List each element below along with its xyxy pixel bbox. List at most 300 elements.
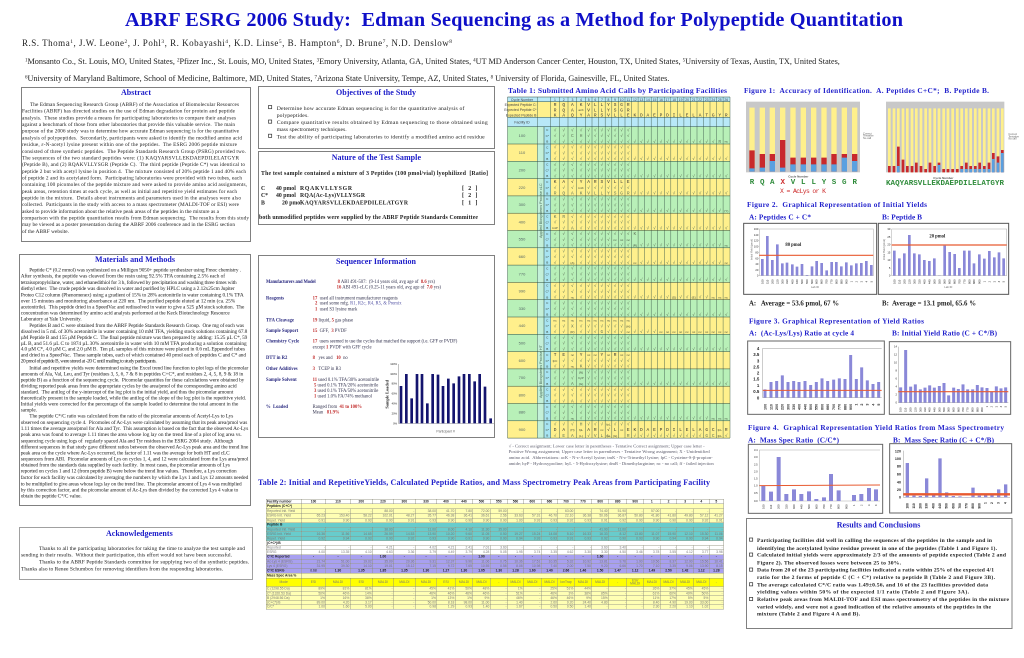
abstract text: (Peptide B), and (2) RQAKVLLYSGR (Peptide C). The third peptide (Peptide C*) was identical to — [22, 161, 245, 168]
figure 4 chart B: 440 — [938, 503, 942, 509]
materials text: to be multiplied to give areas whose logs lay on the trend line. The picomolar amount of Lys 4 was multiplied — [21, 480, 242, 487]
table 2: yields, ratios and mass spec peak areas: - — [348, 528, 349, 531]
sequencer details: 5 used 0.1% TFA/20% acetonitrile — [314, 383, 378, 388]
table 2: yields, ratios and mass spec peak areas: 15.30 — [700, 532, 708, 536]
figure 3 chart A: 4 — [871, 403, 875, 406]
figure 3 chart B: 110 — [904, 407, 908, 412]
table 1 header labels: 5 — [588, 98, 590, 102]
abstract text: comparison with the peptide quantitation results from Edman sequencing. The results from this study — [22, 215, 249, 222]
table 2: yields, ratios and mass spec peak areas: 0.92 — [408, 537, 414, 541]
table 2: yields, ratios and mass spec peak areas: 3% — [569, 592, 573, 595]
figure 4 chart A: 400 — [792, 504, 796, 509]
sequencer details: Sample Solvent — [266, 378, 297, 383]
table 2: yields, ratios and mass spec peak areas: - — [506, 587, 507, 591]
table 2: yields, ratios and mass spec peak areas: 0.94 — [702, 537, 708, 541]
row 800 — [519, 387, 634, 404]
table 2: yields, ratios and mass spec peak areas: 41.70 — [446, 509, 454, 513]
table 2: yields, ratios and mass spec peak areas: 7.15 — [430, 564, 436, 568]
figure 3 chart B: 2 — [896, 393, 898, 397]
figure 3 chart B: 550 — [942, 407, 946, 412]
row 900: 900 — [519, 427, 526, 432]
figure 1 peptide letters A: Q — [760, 179, 765, 187]
table 2: yields, ratios and mass spec peak areas: 0.58 — [500, 564, 507, 568]
figure 3 chart B — [889, 342, 1011, 414]
table 2: yields, ratios and mass spec peak areas: 9.31 — [430, 560, 436, 563]
table 2: yields, ratios and mass spec peak areas: C*/C Reported — [267, 555, 290, 559]
peptide column letters: C — [546, 370, 549, 374]
materials text: 4.0 µM C*, 4.0 µM C, and 2.0 µM B. Ten µL samples of this mixture were placed in 0.6 mL Eppendorf tubes — [21, 346, 245, 353]
table 2: yields, ratios and mass spec peak areas: 14.08 — [549, 532, 557, 536]
acknowledgements text: sending in their results. Without their participation, this effort would not have been successful. — [21, 552, 233, 559]
table 2: yields, ratios and mass spec peak areas: - — [716, 581, 717, 584]
table 2: yields, ratios and mass spec peak areas: 1.40 — [483, 605, 489, 609]
figure 2 chart A: 4 — [864, 280, 868, 282]
table 2: yields, ratios and mass spec peak areas: - — [565, 555, 567, 559]
table 2: yields, ratios and mass spec peak areas: 1% — [320, 596, 325, 600]
bar chart: sample loaded: 80% — [392, 382, 398, 386]
peptide column letters: C — [546, 197, 549, 201]
materials text: 1.11 times the average area/pmol for Ala and Tyr. This assumption is based on the fact that the observed Ac-Lys — [21, 425, 248, 432]
row 900: √√√H — [554, 421, 588, 427]
table 2: yields, ratios and mass spec peak areas: 21.74 — [317, 560, 325, 563]
table 2: yields, ratios and mass spec peak areas: - — [658, 528, 659, 531]
table 2: yields, ratios and mass spec peak areas: MALDI — [544, 581, 555, 584]
table 2: yields, ratios and mass spec peak areas: - — [668, 555, 669, 559]
peptide column letters: C* — [546, 186, 550, 190]
row 200: √√√√√√√ — [587, 173, 634, 179]
figure 3 chart B: 500 — [937, 407, 941, 412]
figure 4 chart A — [748, 444, 883, 513]
figure 1 chart B: Cycle Number — [933, 176, 954, 180]
row 700: (G) — [579, 382, 583, 386]
row 900: √VLL R — [587, 433, 634, 439]
figure 4 chart A: 200 — [777, 504, 781, 509]
figure 2 chart A — [744, 223, 877, 294]
table 2: yields, ratios and mass spec peak areas: - — [371, 546, 372, 550]
figure 2 chart A: 600 — [815, 279, 819, 284]
table 2: yields, ratios and mass spec peak areas: 3.60 — [601, 546, 608, 550]
figure 2 B label: B: Peptide B — [882, 212, 922, 222]
table 2: yields, ratios and mass spec peak areas: 1.49 — [649, 569, 655, 573]
row 600: nc — [594, 353, 597, 357]
peptide column letters: B — [546, 382, 548, 386]
sequencer details: TFA Cleavage — [266, 318, 294, 323]
row 900: fpL — [718, 434, 722, 438]
abstract text: of peptide 2 and its acetylated form. Participating laboratories were provided with two tubes, each — [22, 174, 242, 182]
row 700: √√√ — [554, 369, 588, 375]
row 440: nc — [594, 318, 597, 322]
row 440: nc — [613, 318, 617, 322]
table 2: yields, ratios and mass spec peak areas: 0.91 — [466, 537, 472, 541]
table 2: yields, ratios and mass spec peak areas: - — [506, 601, 507, 605]
table 2: yields, ratios and mass spec peak areas: 5% — [704, 596, 708, 600]
table 2: yields, ratios and mass spec peak areas: 0.90 — [386, 519, 393, 522]
table 2: yields, ratios and mass spec peak areas: 5.10 — [567, 532, 573, 536]
row 660: √√√√√√√ — [587, 254, 634, 260]
table 1 footnote — [509, 444, 714, 466]
conclusion bullets: ratio for the 2 forms of peptide C (C + C*) relative to peptide B (Table 2 and Figure 3B). — [757, 574, 996, 581]
figure 2 chart B: 3 — [992, 280, 996, 282]
conclusion bullets: Relative peak areas from MALDI-TOF and ESI mass spectrometry of the peptides in the mixture — [757, 597, 1010, 603]
table 2: yields, ratios and mass spec peak areas: 9% — [485, 596, 489, 600]
authors: , K.D. Linse — [229, 38, 278, 48]
figure 2 chart A: 80 — [755, 250, 759, 254]
table 2: yields, ratios and mass spec peak areas: 11.06 — [481, 560, 489, 563]
figure 2 chart B: 4 — [997, 280, 1001, 282]
row 770: √√√√√√√ — [587, 272, 634, 278]
figure 3 chart A: 3.5 — [753, 352, 760, 357]
row 880: √√√√√√√√√√√√ — [634, 416, 731, 422]
table 2: yields, ratios and mass spec peak areas: MALDI — [647, 581, 657, 584]
row 100: √√√√ — [554, 139, 588, 145]
figure 2 chart A: 880 — [839, 279, 843, 284]
table 2: yields, ratios and mass spec peak areas: 10.55 — [481, 564, 489, 568]
table 2: yields, ratios and mass spec peak areas: 1.35 — [358, 569, 365, 573]
materials text: peak area was found to average 1.11 times the area whose log lay on the trend line of a plot of log area vs. — [21, 431, 242, 438]
table 2: yields, ratios and mass spec peak areas: 11.56 — [341, 532, 349, 536]
row 880: √√√√√√√ — [587, 410, 634, 416]
table 2: yields, ratios and mass spec peak areas: - — [413, 509, 414, 513]
conclusion bullets — [750, 538, 1010, 618]
table 2: yields, ratios and mass spec peak areas: Reported Init. Yield — [267, 509, 295, 513]
table 2: yields, ratios and mass spec peak areas: 1.67 — [516, 605, 523, 609]
table 2: yields, ratios and mass spec peak areas: 50.06 — [599, 514, 608, 518]
figure 3 chart A: 300 — [786, 404, 790, 410]
row 660 — [519, 248, 731, 266]
table 2: yields, ratios and mass spec peak areas: 1.40 — [585, 605, 591, 609]
figure 4 chart A: 600 — [814, 504, 818, 509]
row 400: tmP — [552, 226, 558, 230]
table 2: yields, ratios and mass spec peak areas: 57.12 — [700, 514, 708, 518]
sequencer details: 3 TCEP in R3 — [313, 367, 342, 372]
table 2: yields, ratios and mass spec peak areas: 16.33 — [599, 532, 608, 536]
table 2: yields, ratios and mass spec peak areas: Lys 4 (ESRG) — [267, 564, 287, 568]
table 2: yields, ratios and mass spec peak areas: 4.00 — [319, 551, 325, 554]
table 2: yields, ratios and mass spec peak areas: 46% — [343, 592, 349, 595]
table 2: yields, ratios and mass spec peak areas: 4 — [700, 500, 702, 503]
row 700: √√√√√√√ — [587, 369, 634, 375]
figure 2 chart B: 2 — [987, 280, 991, 282]
row 700 — [519, 370, 731, 387]
table 2: yields, ratios and mass spec peak areas: - — [685, 555, 686, 559]
bar chart: sample loaded: 20% — [392, 411, 398, 415]
table 2: yields, ratios and mass spec peak areas: - — [549, 555, 550, 559]
table 2: yields, ratios and mass spec peak areas: 46% — [550, 592, 557, 595]
bar chart: sample loaded: 120% — [390, 362, 398, 366]
peptide column letters: B — [546, 243, 548, 247]
figure 4 chart A: 3.4 — [754, 448, 758, 452]
row 300: (Y) — [724, 209, 728, 213]
table 2: yields, ratios and mass spec peak areas: - — [539, 546, 540, 550]
table 1 header labels: 10 — [620, 98, 624, 102]
table 2: yields, ratios and mass spec peak areas: - — [675, 509, 676, 513]
table 1 header labels: 23 — [705, 98, 709, 102]
table 2: yields, ratios and mass spec peak areas: 36.61 — [481, 514, 489, 518]
figure 4 chart A: 500 — [807, 504, 811, 509]
table 2: yields, ratios and mass spec peak areas: 770 — [580, 500, 586, 503]
row 900: fpL — [606, 422, 611, 426]
materials text: After synthesis, the peptide was cleaved from the resin using 92.5% TFA containing 2.5% each of — [21, 273, 225, 280]
table 2: yields, ratios and mass spec peak areas: 0.90 — [653, 537, 659, 541]
table 2: yields, ratios and mass spec peak areas: 0.90 — [343, 519, 349, 522]
row 660: 660 — [519, 254, 526, 259]
peptide list: B — [261, 200, 265, 206]
row 880: 880 — [519, 410, 526, 415]
table 2: yields, ratios and mass spec peak areas: 0.92 — [319, 537, 325, 541]
materials text: obtain the peptide C*/C value. — [21, 494, 82, 500]
row 440: nc — [705, 330, 709, 334]
table 2: yields, ratios and mass spec peak areas: 38.00 — [428, 509, 436, 513]
table 2: yields, ratios and mass spec peak areas: 7.01 — [483, 546, 489, 550]
row 220: √√√√√√√√√√√√√√√ — [634, 191, 731, 197]
figure 2 chart B: 900 — [977, 279, 981, 284]
figure 3 chart A: 220 — [781, 404, 785, 410]
table 2: yields, ratios and mass spec peak areas: MALDI — [578, 581, 588, 584]
table 2: yields, ratios and mass spec peak areas: 14.65 — [363, 532, 372, 536]
table 2: yields, ratios and mass spec peak areas: 10.41 — [714, 560, 723, 563]
table 2: yields, ratios and mass spec peak areas: 58.22 — [363, 514, 372, 518]
row 880: nc — [725, 416, 728, 420]
table 2: yields, ratios and mass spec peak areas: Ac-Lys 4 (ESRG) — [267, 560, 292, 563]
table 2: yields, ratios and mass spec peak areas: 400 — [443, 500, 449, 503]
peptide list: RQA(Ac-Lys)VLLYSGR — [300, 192, 366, 199]
materials text: by this correction factor, and the picomolar amount of Ac-Lys then divided by the corrected Lys 4 value to — [21, 486, 239, 493]
peptide column letters: B — [546, 330, 548, 334]
row 440: √√√√√√ — [587, 323, 634, 329]
figure 2 chart A: 80 pmol — [785, 243, 802, 248]
figure 3 chart B: 330 — [923, 407, 927, 412]
materials text: over 15 minutes and monitoring absorbance at 220 nm. The purified peptide eluted at 12 min (ca. 25% — [21, 297, 236, 304]
table 2: yields, ratios and mass spec peak areas: 61% — [653, 592, 659, 595]
materials text: theoretically present in the sample loaded, while the antilog of the slope of the log plot is the repetitive yield. — [21, 394, 246, 401]
row 990: √√√√√√√ — [587, 283, 634, 289]
table 2: yields, ratios and mass spec peak areas: 19.00 — [684, 601, 693, 605]
row 550 — [519, 231, 731, 249]
table 2: yields, ratios and mass spec peak areas: MALDI — [595, 581, 605, 584]
table 2: yields, ratios and mass spec peak areas: 46% — [429, 592, 436, 595]
sequencer details: 8 ABI 491-507: (9-14 years old, avg age of 8.6 yrs) — [338, 280, 435, 285]
figure 4 chart B: 120 — [895, 449, 901, 453]
row 700: hyP — [578, 376, 584, 380]
row 660: nc — [633, 261, 637, 265]
figure 2 chart B: 700 — [957, 279, 961, 284]
row 400 — [519, 214, 731, 231]
figure 2 chart A: 550 — [805, 279, 809, 284]
table 2: yields, ratios and mass spec peak areas: (C+C*)/B — [267, 601, 280, 605]
peptide column letters: C — [546, 336, 549, 340]
table 2: yields, ratios and mass spec peak areas: 8.15 — [716, 564, 723, 568]
figure 3 chart A: 200 — [775, 404, 779, 410]
sequencer details: 3 used 0.1% TFA/50% acetonitrile — [314, 389, 378, 394]
table 2: yields, ratios and mass spec peak areas: - — [539, 528, 540, 531]
figure 2 chart A: 1 — [849, 280, 853, 282]
table 2: yields, ratios and mass spec peak areas: 1.90 — [636, 560, 643, 563]
row 700: √√√ — [554, 375, 588, 381]
table 2: yields, ratios and mass spec peak areas: ESRG — [267, 551, 276, 554]
table 2: yields, ratios and mass spec peak areas: 1 — [651, 500, 653, 503]
figure 1 peptide letters A: V — [791, 179, 796, 187]
table 2: yields, ratios and mass spec peak areas: 0.98 — [430, 605, 436, 609]
table 2: yields, ratios and mass spec peak areas: 1.47 — [614, 569, 621, 573]
table 2: yields, ratios and mass spec peak areas: 1.60 — [597, 555, 603, 559]
table 1 header labels: 1 — [554, 98, 556, 102]
row 770: √√√√ — [554, 266, 588, 272]
row 900: √√√√√√√√√√√GC √ — [634, 433, 731, 439]
row 990: √√ √ — [554, 294, 588, 300]
row 600: nc — [571, 365, 574, 369]
table 2: yields, ratios and mass spec peak areas: 11.05 — [481, 532, 489, 536]
row 800: √√√√√√√ — [587, 398, 634, 404]
table 2: yields, ratios and mass spec peak areas: 200 — [359, 500, 364, 503]
table 2: yields, ratios and mass spec peak areas: - — [413, 587, 414, 591]
peptide column letters: B — [546, 192, 548, 196]
table 2: yields, ratios and mass spec peak areas: 9.06 — [686, 564, 693, 568]
row 990: √√√√ — [554, 283, 588, 289]
table 2: yields, ratios and mass spec peak areas: - — [722, 509, 723, 513]
row 770 — [519, 266, 731, 283]
row 300: √√√√√√√ — [587, 196, 634, 202]
table 2: yields, ratios and mass spec peak areas: 12.37 — [446, 560, 454, 563]
table 2: yields, ratios and mass spec peak areas: 2.66 — [563, 569, 569, 573]
table 2: yields, ratios and mass spec peak areas: 3.79 — [466, 551, 472, 554]
table 2: yields, ratios and mass spec peak areas: - — [413, 592, 414, 595]
affiliations: 5 — [683, 58, 686, 64]
table 1 header labels: 15 — [653, 98, 656, 102]
table 2: yields, ratios and mass spec peak areas: 0.94 — [670, 537, 676, 541]
table 2: yields, ratios and mass spec peak areas: - — [675, 528, 676, 531]
table 2: yields, ratios and mass spec peak areas: 0.92 — [567, 519, 573, 522]
row 770: √√√√√√√ — [587, 277, 634, 283]
peptide column letters: C* — [546, 255, 550, 259]
row 440: nc — [666, 330, 670, 334]
row 110: 110 — [519, 150, 526, 155]
row 900: (H) — [570, 428, 575, 432]
table 2: yields, ratios and mass spec peak areas: 50% — [702, 592, 708, 595]
conclusion bullets: Data from 20 of the 23 participating facilities indicated a ratio within 25% of the expected 4/1 — [757, 568, 994, 574]
table 2: yields, ratios and mass spec peak areas: 5% — [688, 596, 693, 600]
row 110: √√√√√√√ — [587, 145, 634, 151]
figure 3 chart A: 770 — [838, 404, 842, 410]
row 330: √√√√ — [554, 312, 588, 318]
row 550: K — [634, 231, 640, 237]
row 700: (N) — [579, 370, 583, 374]
row 440: (H) — [626, 324, 630, 328]
row 800: √√√√ — [554, 387, 588, 393]
table 2: yields, ratios and mass spec peak areas: 9.72 — [448, 564, 454, 568]
figure 4 chart B: 200 — [918, 503, 922, 509]
table 1 header labels: 18 — [672, 98, 676, 102]
row 440: nc — [718, 330, 722, 334]
figure 4 chart B: 20 — [897, 488, 901, 492]
materials text: diethyl ether. The crude peptide was dissolved in water and purified by HPLC using a 2.12x25cm Jupiter — [21, 285, 235, 292]
row 770: 770 — [519, 271, 526, 276]
figure 2 average B: B: Average = 13.1 pmol, 65.6 % — [882, 300, 976, 308]
figure 2 chart B: 5 — [889, 266, 891, 270]
figure 4 chart A: 1.0 — [754, 484, 758, 488]
conclusion bullets: mixture (Table 2 and Figure 4 A and B). — [757, 611, 861, 618]
figure 2 chart A: 200 — [770, 279, 774, 284]
row 900: fpL — [718, 428, 722, 432]
table 2: yields, ratios and mass spec peak areas: 1.60 — [529, 569, 536, 573]
table 2: yields, ratios and mass spec peak areas: - — [371, 528, 372, 531]
table 2: yields, ratios and mass spec peak areas: 0.93 — [534, 537, 540, 541]
peptide column letters: C* — [546, 168, 550, 172]
figure 3 chart B: 700 — [961, 407, 965, 412]
table 2: yields, ratios and mass spec peak areas: - — [722, 592, 723, 595]
row 900: √EA — [554, 433, 588, 439]
table 2: yields, ratios and mass spec peak areas: 8.00 — [448, 528, 454, 531]
figure 1 peptide letters A: Y — [822, 179, 827, 187]
table 2: yields, ratios and mass spec peak areas: 0.90 — [686, 519, 693, 522]
figure 1 peptide letters A: R — [852, 179, 857, 187]
table 2: yields, ratios and mass spec peak areas: 24.40 — [583, 601, 591, 605]
row 330: √√√√√√√ — [587, 300, 634, 306]
peptide column letters: C* — [546, 272, 550, 276]
figure 1 chart A — [746, 102, 874, 178]
peptide column letters: B — [546, 399, 548, 403]
table 2: yields, ratios and mass spec peak areas: 81% — [343, 587, 349, 591]
sequencer details: % Loaded — [266, 405, 288, 410]
figure 3 chart B: 560 — [947, 407, 951, 412]
row 400: √√√√√√√√√√√√√√√ — [634, 225, 731, 231]
row 400: 400 — [519, 219, 526, 224]
figure 3 chart B: 4 — [999, 405, 1003, 407]
figure 2 chart A: 20 — [755, 268, 759, 272]
table 1 header labels: Cycle Number — [511, 98, 534, 102]
authors: , B. Hampton — [282, 38, 337, 48]
row 330: √√√√√√√ — [587, 312, 634, 318]
objective bullets: Determine how accurate Edman sequencing is for the quantitative analysis of — [277, 105, 464, 112]
affiliations: University of Texas, Austin, TX, United States, — [685, 57, 840, 66]
table 1 header labels: 14 — [646, 98, 650, 102]
figure 3 chart B: 1 — [985, 405, 989, 407]
figure 3 chart A: 2 — [860, 404, 864, 406]
table 2: yields, ratios and mass spec peak areas: 0.90 — [636, 519, 643, 522]
row 440: nc — [600, 318, 604, 322]
table 2: yields, ratios and mass spec peak areas: MALDI — [510, 581, 521, 584]
table 2: yields, ratios and mass spec peak areas: 7.10 — [653, 564, 659, 568]
figure 4 chart B: 110 — [912, 503, 916, 509]
table 2: yields, ratios and mass spec peak areas: 3.74 — [534, 551, 540, 554]
row 220: VLLYSGR — [587, 191, 634, 197]
figure 4 chart B: 80 — [897, 465, 901, 469]
table 2: yields, ratios and mass spec peak areas: 8.40 — [653, 601, 659, 605]
table 2: yields, ratios and mass spec peak areas: 4.80 — [601, 601, 608, 605]
materials text: Initial and repetitive yields were determined using the Excel trend line function to plot logs of the picomolar — [29, 364, 249, 371]
figure 4 chart B: 900 — [977, 503, 981, 509]
row 770: √√√√ — [554, 277, 588, 283]
figure 3 chart B: 5 — [1004, 405, 1008, 407]
figure 4 chart A: 770 — [829, 504, 833, 509]
peptide column letters: B — [546, 364, 548, 368]
vertical label: Procise cLC: Applied Biosystems Procise cLC — [539, 183, 543, 238]
table 2: yields, ratios and mass spec peak areas: 0.93 — [636, 537, 643, 541]
abstract text: peak areas, retention times at each cycle, as well as initial and repetitive yield estimates for each — [22, 188, 237, 195]
table 2: yields, ratios and mass spec peak areas: 48.27 — [406, 514, 414, 518]
table 2: yields, ratios and mass spec peak areas: 660 — [547, 500, 552, 503]
figure 1 peptide letters A: G — [842, 179, 847, 187]
table 2: yields, ratios and mass spec peak areas: 17.51 — [532, 560, 540, 563]
abstract text: The Edman Sequencing Research Group (ABRF) of the Association of Biomolecular Resources — [30, 101, 239, 108]
table 1 header labels: acK — [578, 108, 585, 112]
abstract text: containing 100 picomoles of the peptide mixture and were asked to provide amino acid assignments, — [22, 181, 247, 188]
figure 4 chart B: 3 — [997, 502, 1001, 504]
figure 3 chart A: 440 — [803, 404, 807, 410]
materials text: and dried in a SpeedVac. These sample tubes, each of which contained 40 pmol each of peptides C and C* and — [21, 352, 246, 359]
table 2: yields, ratios and mass spec peak areas: 15% — [601, 596, 608, 600]
table 2: yields, ratios and mass spec peak areas: 3.40 — [620, 546, 626, 550]
row 880: √√√√ — [554, 404, 588, 410]
